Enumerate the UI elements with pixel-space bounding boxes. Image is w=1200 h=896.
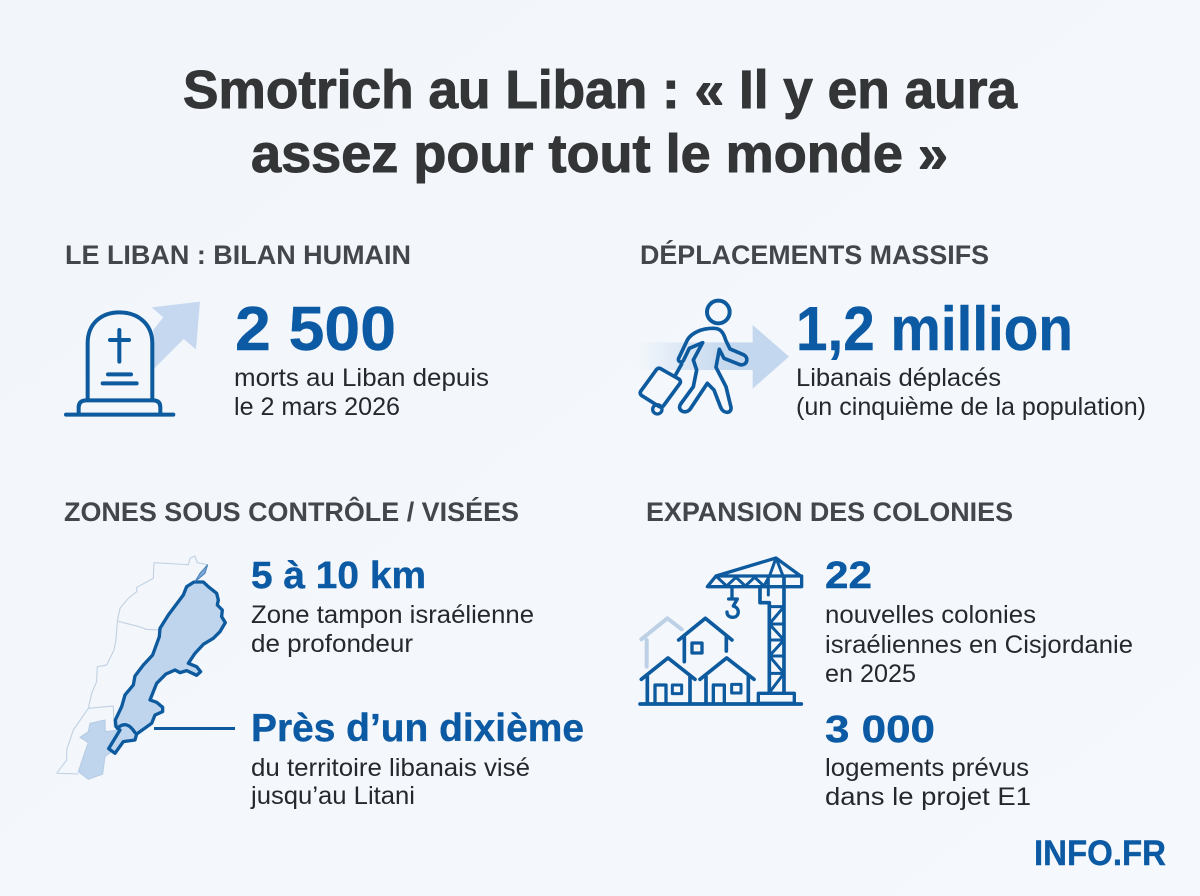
title: assez pour tout le monde » <box>251 124 948 184</box>
text: déplacés: (un cinquième de la population) <box>796 393 1146 421</box>
text: morts <box>234 364 489 421</box>
text: territoire: du territoire libanais visé <box>251 754 530 782</box>
text: zone tampon <box>251 601 534 658</box>
panel: déplacements <box>638 239 1146 421</box>
stat: 1,2 million: 1,2 million <box>796 295 1073 364</box>
logo: INFO.FR: INFO.FR <box>1034 834 1166 873</box>
text: déplacés: Libanais déplacés <box>796 364 1001 392</box>
text: logements: logements prévus <box>825 754 1029 782</box>
text: territoire: jusqu’au Litani <box>250 782 415 810</box>
map: Liban <box>57 556 225 779</box>
text: zone tampon: de profondeur <box>251 630 413 658</box>
stat: 2 500: 2 500 <box>235 295 396 364</box>
icon: tombstone with rising arrow <box>66 302 200 415</box>
text: zone tampon: Zone tampon israélienne <box>251 601 534 629</box>
stat: 5 à 10 km: 5 à 10 km <box>251 555 426 597</box>
panel: bilan humain <box>65 240 489 421</box>
title <box>183 60 1018 184</box>
text: déplacés <box>796 364 1146 421</box>
text: logements <box>825 754 1031 811</box>
text: nouvelles colonies: nouvelles colonies <box>825 601 1036 629</box>
heading: bilan humain: LE LIBAN : BILAN HUMAIN <box>65 240 411 270</box>
panel: zones <box>57 496 584 810</box>
icon: crane and houses <box>640 558 802 704</box>
heading: déplacements: DÉPLACEMENTS MASSIFS <box>640 239 989 270</box>
heading: colonies: EXPANSION DES COLONIES <box>646 497 1013 527</box>
text: morts: morts au Liban depuis <box>234 364 489 392</box>
heading: zones: ZONES SOUS CONTRÔLE / VISÉES <box>64 496 519 527</box>
stat: 3 000: 3 000 <box>825 709 935 751</box>
text: territoire <box>250 754 530 810</box>
text: nouvelles colonies: en 2025 <box>825 660 916 688</box>
text: nouvelles colonies: israéliennes en Cisjordanie <box>825 631 1133 659</box>
title: Smotrich au Liban : « Il y en aura <box>183 60 1018 120</box>
stat: près d'un dixième: Près d’un dixième <box>251 707 584 750</box>
icon: walking person with suitcase and arrow <box>638 301 789 414</box>
text: logements: dans le projet E1 <box>825 783 1031 811</box>
text: morts: le 2 mars 2026 <box>234 393 400 421</box>
panel: colonies <box>640 497 1133 811</box>
text: nouvelles colonies <box>825 601 1133 688</box>
leader line <box>154 727 235 730</box>
stat: 22: 22 <box>825 555 872 597</box>
